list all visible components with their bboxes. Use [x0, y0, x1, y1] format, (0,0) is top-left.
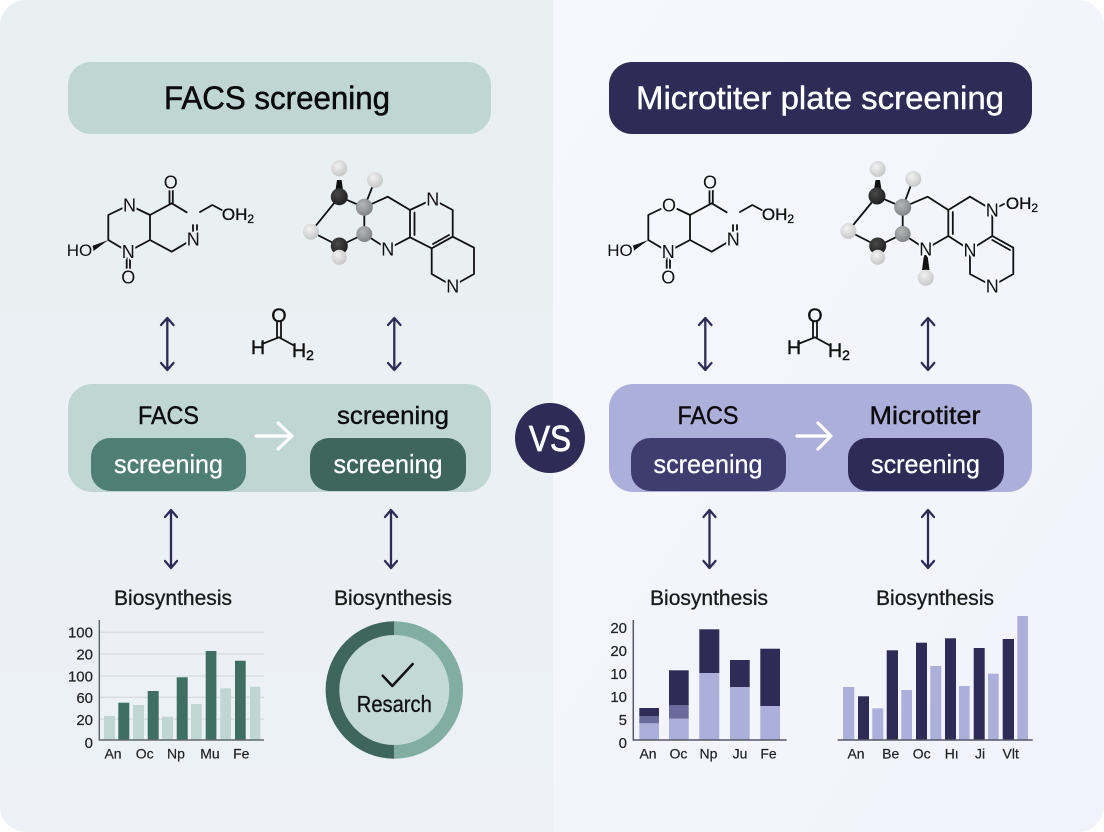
bar chart: Microtiter stacked: Fe: [760, 746, 777, 762]
molecule: Microtiter left structure: O: [703, 172, 717, 192]
molecule: Microtiter formaldehyde: [787, 305, 850, 363]
label: Resarch: Resarch: [357, 691, 432, 717]
panel: Microtiter background: [553, 0, 1104, 832]
molecule: FACS left structure: [67, 172, 254, 288]
molecule: Microtiter left structure: O: [661, 268, 675, 288]
molecule: FACS formaldehyde: H: [251, 337, 265, 359]
panel: FACS workflow: [68, 384, 491, 492]
molecule: Microtiter ball and stick structure: OH: [1006, 194, 1031, 213]
bar chart: FACS: Mu: [200, 746, 220, 762]
bar chart: FACS: 100: [68, 624, 93, 642]
heading: Microtiter plate screening: Microtiter plate screening: [636, 80, 1004, 116]
bar chart: Microtiter grouped: An: [847, 746, 865, 762]
arrow: Microtiter bottom right: [922, 510, 934, 568]
donut chart: Research: [326, 621, 463, 759]
heading: Biosynthesis Microtiter stacked chart: Biosynthesis: [650, 587, 768, 610]
bar chart: FACS: 60: [76, 690, 93, 707]
molecule: Microtiter left structure: N: [727, 230, 740, 250]
molecule: Microtiter left structure: OH: [762, 205, 787, 224]
molecule: FACS left structure: HO: [67, 241, 92, 260]
molecule: Microtiter formaldehyde: H: [787, 337, 801, 359]
molecule: FACS ball and stick structure: N: [381, 240, 394, 260]
bar chart: FACS: [68, 620, 264, 762]
heading: FACS screening: FACS screening: [164, 80, 390, 116]
molecule: Microtiter left structure: 2: [787, 212, 794, 226]
panel: Microtiter workflow: [609, 384, 1032, 492]
label: FACS: FACS: [678, 402, 738, 430]
badge: VS: VS: [529, 418, 571, 459]
heading: Biosynthesis Microtiter grouped chart: Biosynthesis: [876, 587, 994, 610]
molecule: Microtiter left structure: N: [662, 242, 675, 262]
molecule: FACS left structure: O: [164, 172, 178, 192]
label: Microtiter: Microtiter: [870, 402, 980, 430]
molecule: FACS ball and stick structure: N: [446, 276, 459, 296]
molecule: FACS formaldehyde: H: [292, 340, 306, 362]
molecule: Microtiter ball and stick structure: N: [986, 276, 999, 296]
molecule: FACS left structure: 2: [247, 212, 254, 226]
bar chart: Microtiter grouped: Be: [882, 746, 899, 762]
heading: Biosynthesis FACS donut: Biosynthesis: [334, 587, 452, 610]
molecule: FACS formaldehyde: O: [271, 305, 287, 327]
bar chart: Microtiter stacked: 10: [610, 666, 627, 683]
pill: screening right: [848, 438, 1004, 491]
bar chart: Microtiter grouped: Hı: [945, 746, 959, 762]
bar chart: FACS: 20: [76, 646, 93, 664]
label: FACS: FACS: [138, 402, 199, 430]
molecule: FACS left structure: N: [123, 196, 136, 216]
bar chart: Microtiter stacked: 10: [610, 689, 627, 706]
molecule: Microtiter ball and stick structure: N: [919, 240, 932, 260]
molecule: FACS left structure: N: [122, 242, 135, 262]
pill: screening left: screening: [654, 449, 762, 479]
arrow: Microtiter bottom left: [704, 510, 716, 568]
molecule: FACS formaldehyde: [251, 305, 314, 363]
heading: Microtiter plate screening: [609, 62, 1032, 134]
heading: FACS screening: [68, 62, 491, 134]
arrow: FACS top left: [161, 318, 174, 370]
molecule: Microtiter formaldehyde: 2: [842, 347, 850, 363]
molecule: Microtiter left structure: [607, 172, 794, 288]
molecule: Microtiter ball and stick structure: 2: [1031, 201, 1038, 215]
pill: screening right: screening: [334, 449, 442, 479]
bar chart: FACS: Oc: [136, 746, 154, 762]
bar chart: Microtiter grouped: [838, 616, 1033, 762]
label: screening: screening: [337, 402, 449, 430]
molecule: FACS left structure: OH: [222, 205, 247, 224]
pill: screening right: screening: [871, 449, 980, 479]
bar chart: FACS: 0: [85, 735, 93, 752]
molecule: Microtiter formaldehyde: H: [828, 340, 842, 362]
bar chart: Microtiter grouped: Vlt: [1003, 746, 1019, 762]
arrow: FACS bottom right: [385, 510, 397, 568]
bar chart: Microtiter stacked: [610, 620, 787, 762]
bar chart: Microtiter stacked: 0: [619, 735, 627, 752]
bar chart: Microtiter grouped: Oc: [913, 746, 931, 762]
icon: check mark: [383, 664, 413, 686]
molecule: FACS left structure: N: [187, 230, 200, 250]
pill: screening right: [310, 438, 466, 491]
bar chart: FACS: Fe: [233, 746, 250, 762]
bar chart: Microtiter stacked: Oc: [670, 746, 687, 762]
arrow: FACS workflow: [256, 423, 292, 449]
molecule: Microtiter left structure: O: [662, 196, 676, 216]
molecule: FACS left structure: O: [121, 268, 135, 288]
bar chart: Microtiter stacked: 20: [610, 620, 627, 637]
arrow: Microtiter top right: [922, 318, 934, 370]
bar chart: FACS: 20: [76, 712, 93, 729]
bar chart: Microtiter stacked: Ju: [733, 746, 747, 762]
molecule: Microtiter formaldehyde: O: [807, 305, 823, 327]
bar chart: FACS: 100: [68, 668, 93, 686]
bar chart: Microtiter stacked: An: [639, 746, 657, 762]
molecule: Microtiter ball and stick structure: N: [964, 240, 976, 260]
molecule: Microtiter left structure: HO: [607, 241, 633, 260]
bar chart: Microtiter stacked: 20: [610, 643, 627, 660]
molecule: FACS formaldehyde: 2: [306, 347, 314, 363]
badge: VS: [515, 403, 585, 473]
molecule: FACS ball and stick structure: [303, 160, 474, 296]
arrow: FACS bottom left: [165, 510, 177, 568]
arrow: Microtiter top left: [699, 318, 712, 370]
molecule: FACS ball and stick structure: N: [426, 190, 439, 210]
molecule: Microtiter ball and stick structure: [840, 161, 1038, 296]
bar chart: FACS: An: [104, 746, 122, 762]
heading: Biosynthesis FACS chart: Biosynthesis: [114, 587, 232, 610]
pill: screening left: screening: [114, 449, 223, 479]
arrow: FACS top right: [388, 318, 400, 370]
pill: screening left: [91, 438, 246, 491]
bar chart: Microtiter grouped: Ji: [975, 746, 985, 762]
bar chart: FACS: Np: [167, 746, 185, 762]
pill: screening left: [631, 438, 786, 491]
arrow: Microtiter workflow: [797, 423, 831, 449]
bar chart: Microtiter stacked: Np: [700, 746, 718, 762]
molecule: Microtiter ball and stick structure: N: [986, 200, 999, 220]
panel: FACS background: [0, 0, 553, 832]
bar chart: Microtiter stacked: 5: [619, 712, 627, 729]
